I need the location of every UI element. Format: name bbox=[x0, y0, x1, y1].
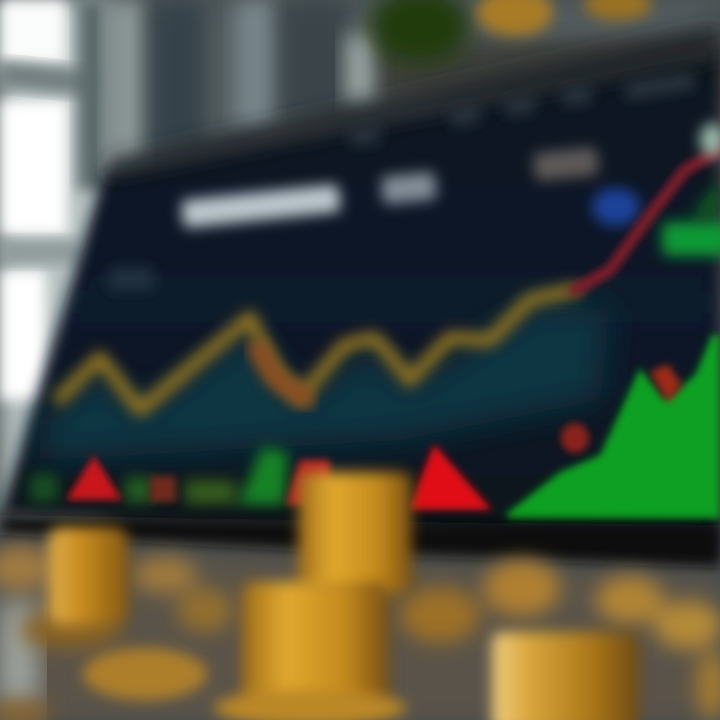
teal area under line bbox=[40, 305, 610, 460]
screen bottom bezel bbox=[0, 515, 720, 568]
coin stack centre tall bbox=[298, 472, 412, 594]
screen top bezel bbox=[105, 25, 720, 178]
screen labels bbox=[108, 147, 640, 290]
red triangles bbox=[66, 364, 682, 510]
chart screen bbox=[0, 25, 720, 568]
top coins bbox=[477, 0, 652, 36]
coin stack centre lower bbox=[242, 582, 388, 707]
coin stack left bbox=[48, 527, 128, 625]
green area chart bbox=[505, 335, 720, 520]
header tabs bbox=[349, 72, 696, 146]
plant bbox=[370, 0, 470, 64]
desk surface bbox=[0, 545, 720, 720]
right green labels bbox=[662, 123, 720, 256]
coin low left bbox=[83, 648, 207, 700]
gold line bbox=[60, 290, 575, 410]
coin stack right bbox=[492, 632, 638, 720]
gold coins bbox=[0, 472, 720, 720]
back coins bbox=[0, 546, 720, 720]
red rising line bbox=[575, 150, 720, 290]
small green bars bbox=[30, 447, 288, 505]
